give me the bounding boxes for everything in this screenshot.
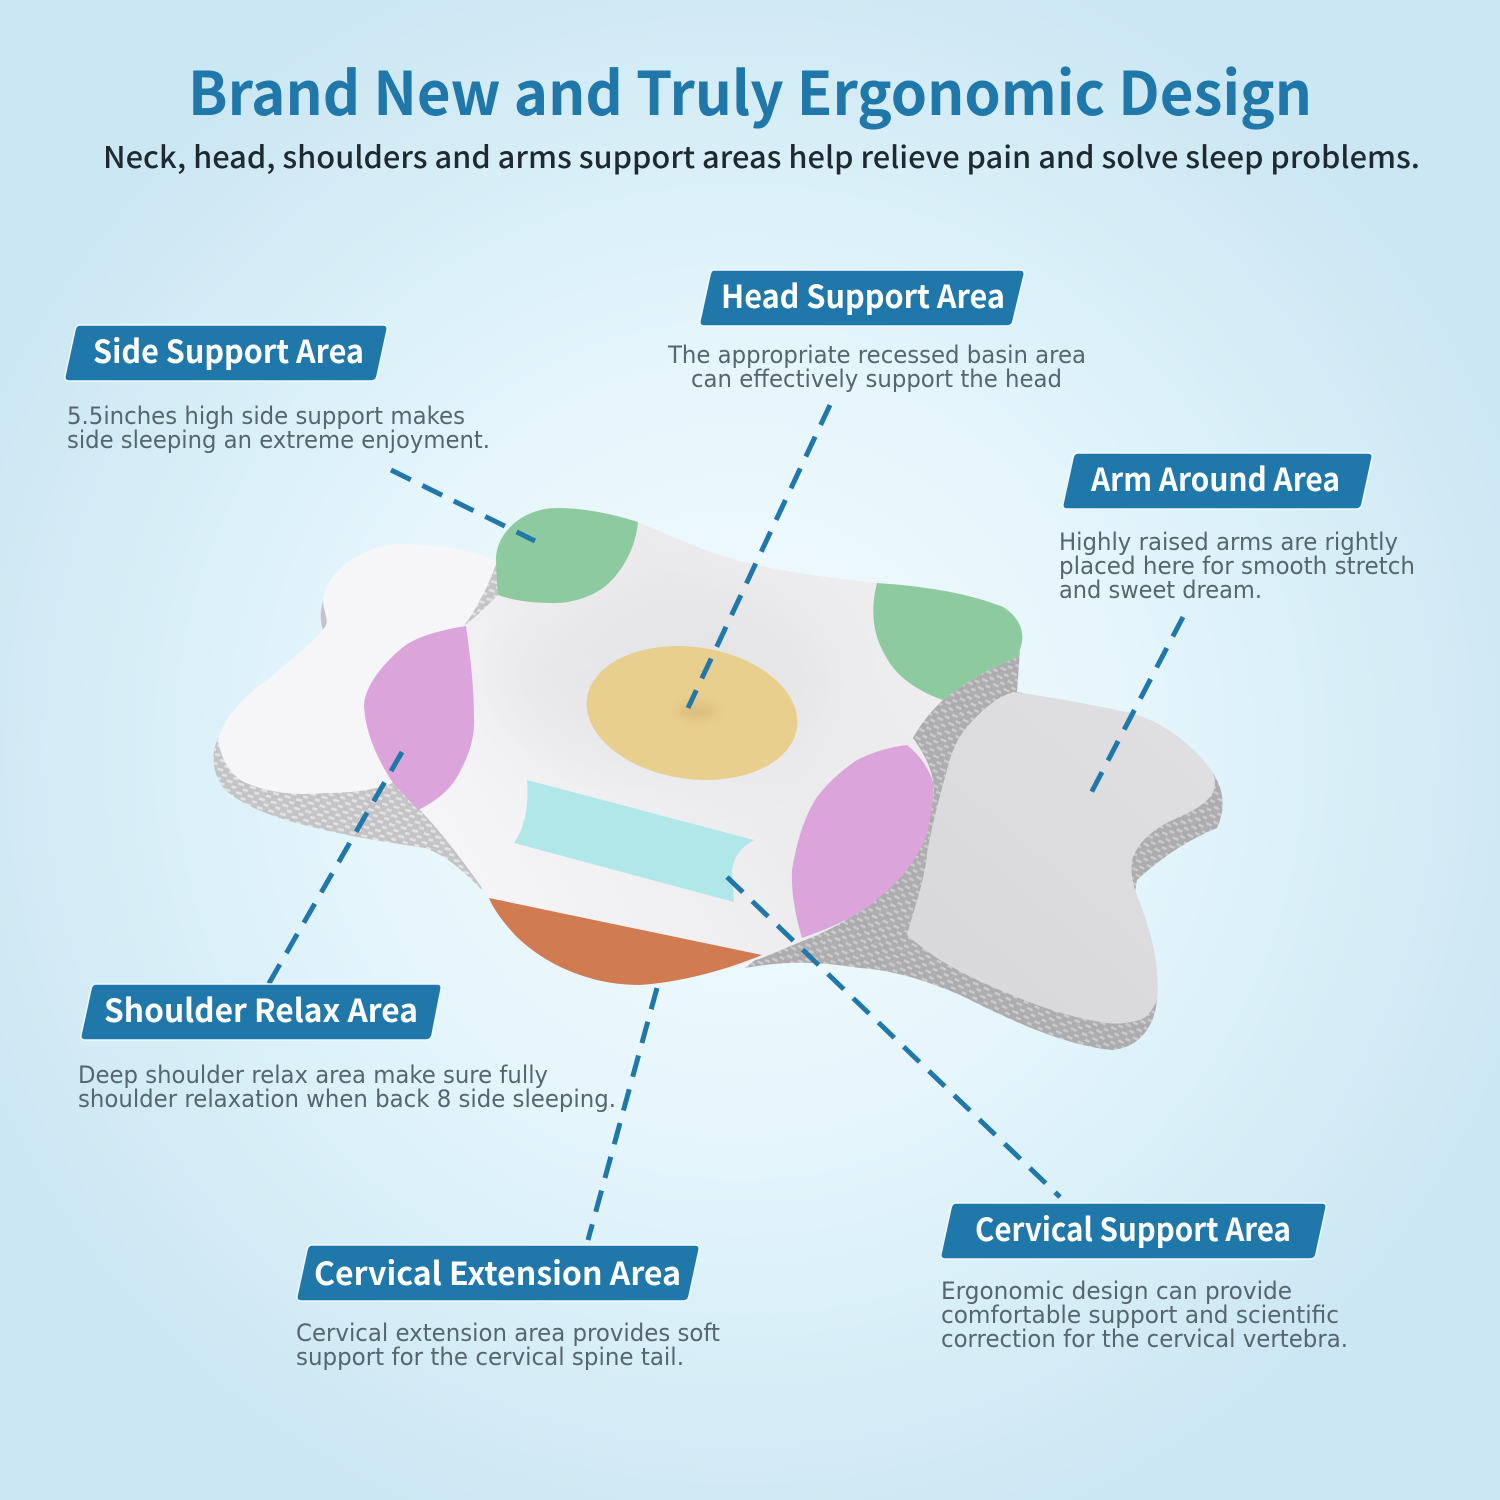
text: arm around: Highly raised arms are rightly [1059, 528, 1398, 556]
recessed shading around the head basin [490, 585, 830, 775]
text: cervical support: comfortable support and scientific [941, 1301, 1339, 1329]
pillow illustration [213, 508, 1223, 1050]
text: arm around: placed here for smooth stretch [1059, 552, 1415, 580]
left wing top surface [218, 544, 498, 794]
text: head support: The appropriate recessed basin area [667, 341, 1086, 369]
label: cervical extension [297, 1245, 699, 1301]
pointer line: shoulder relax [268, 752, 402, 985]
label: arm around [1063, 453, 1372, 509]
pointer line: side support [391, 470, 535, 541]
pointer line: head support [688, 405, 830, 708]
text: side support: 5.5inches high side support makes [67, 402, 465, 430]
heading: cervical extension: Cervical Extension Area [314, 1249, 681, 1295]
heading: cervical support: Cervical Support Area [975, 1205, 1291, 1251]
zone: shoulder relax (mauve right) [792, 745, 934, 938]
right wing top surface [907, 692, 1215, 1024]
label: side support [65, 325, 387, 381]
mesh side: left wing upper notch [463, 562, 500, 627]
pointer line: cervical support [727, 877, 1060, 1197]
label: shoulder relax [81, 984, 441, 1040]
mesh side: left wing [213, 738, 482, 890]
zone: side support (green left) [496, 508, 638, 603]
heading: side support: Side Support Area [93, 327, 364, 373]
mesh side: right wing [745, 650, 1223, 1050]
label: head support [700, 270, 1024, 326]
text: arm around: and sweet dream. [1059, 576, 1262, 604]
heading: arm around: Arm Around Area [1090, 455, 1340, 501]
callout: cervical extension [296, 1245, 720, 1371]
text: shoulder relax: shoulder relaxation when back 8 side sleeping. [78, 1085, 616, 1113]
text: cervical extension: support for the cervical spine tail. [296, 1343, 684, 1371]
heading: shoulder relax: Shoulder Relax Area [104, 986, 418, 1032]
heading: head support: Head Support Area [721, 272, 1005, 318]
zone: cervical extension (orange) [489, 898, 762, 985]
pointer line: cervical extension [588, 988, 657, 1240]
callout: side support [65, 325, 490, 454]
label: cervical support [941, 1203, 1326, 1259]
zone: cervical support (cyan band) [514, 780, 754, 902]
title: Brand New and Truly Ergonomic Design [188, 46, 1312, 133]
text: side support: side sleeping an extreme enjoyment. [67, 426, 490, 454]
callout: head support [667, 270, 1086, 393]
text: head support: can effectively support the head [691, 365, 1062, 393]
main body top surface [380, 508, 1022, 985]
zone: shoulder relax (mauve left) [364, 626, 474, 810]
callout: arm around [1059, 453, 1415, 604]
pointer line: arm around [1090, 617, 1183, 795]
subtitle: Neck, head, shoulders and arms support areas help relieve pain and solve sleep problems. [103, 133, 1420, 177]
text: shoulder relax: Deep shoulder relax area make sure fully [78, 1061, 548, 1089]
callout: shoulder relax [78, 984, 616, 1113]
text: cervical extension: Cervical extension area provides soft [296, 1319, 720, 1347]
callout: cervical support [941, 1203, 1348, 1353]
zone: head support (yellow basin) [578, 633, 806, 793]
mesh side: left outer sliver [321, 585, 335, 630]
zone: arm around (green right) [873, 583, 1022, 700]
text: cervical support: correction for the cervical vertebra. [941, 1325, 1348, 1353]
text: cervical support: Ergonomic design can provide [941, 1277, 1292, 1305]
